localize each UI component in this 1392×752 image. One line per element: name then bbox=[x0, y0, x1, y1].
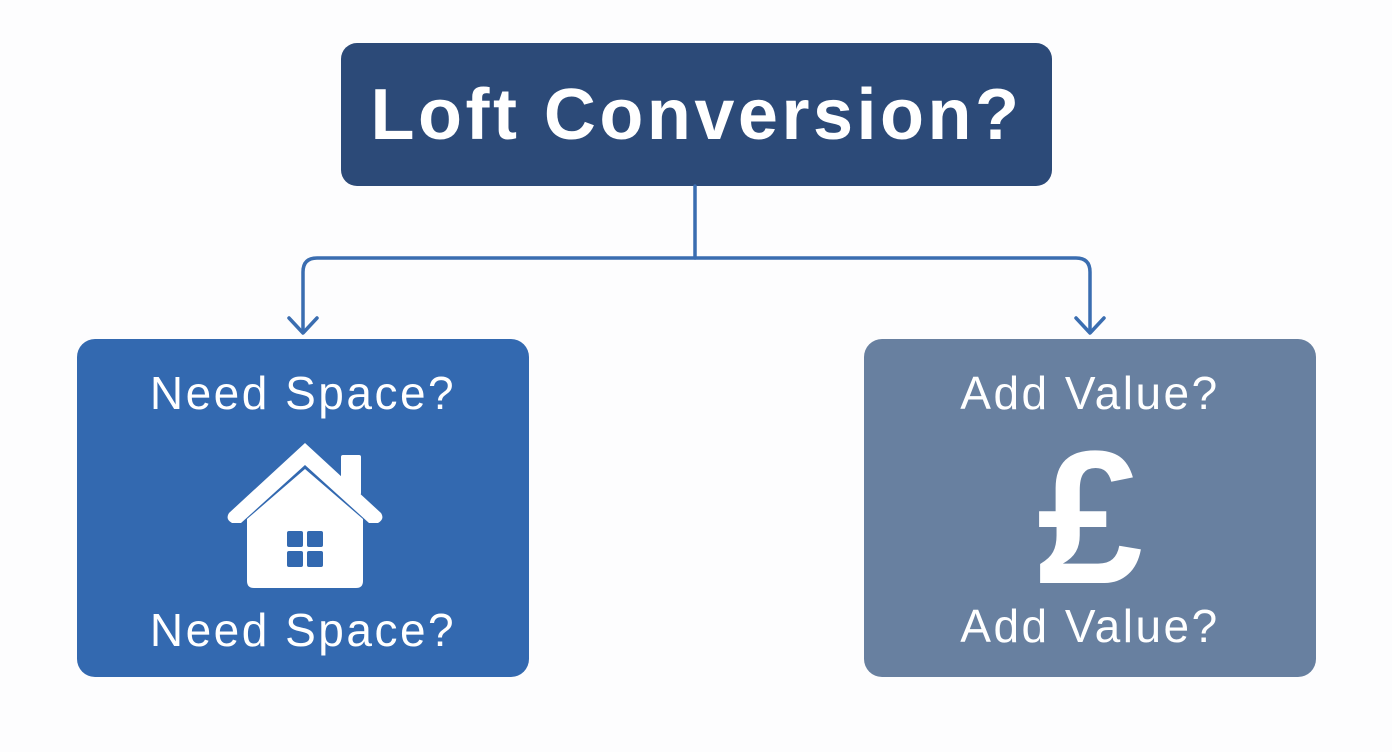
title text: Loft Conversion? bbox=[371, 75, 1022, 155]
panel: need space bbox=[77, 339, 529, 677]
heading: need space: Need Space? bbox=[150, 367, 456, 419]
panel: add value bbox=[864, 339, 1316, 677]
icon: house bbox=[228, 443, 382, 588]
caption: add value: Add Value? bbox=[960, 600, 1220, 652]
icon: pound sign: £ bbox=[1037, 412, 1143, 624]
caption: need space: Need Space? bbox=[150, 604, 456, 656]
heading: add value: Add Value? bbox=[960, 367, 1220, 419]
title box bbox=[341, 43, 1052, 186]
